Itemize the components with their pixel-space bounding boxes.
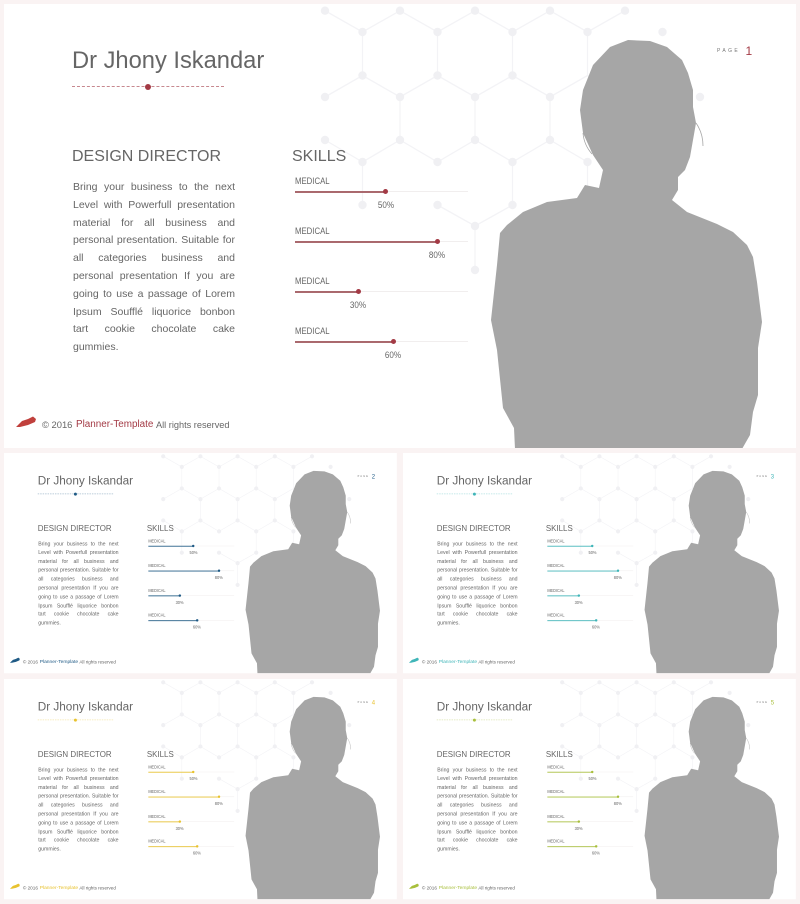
page number: PAGE: [756, 701, 768, 704]
skill bar 80%: 80%: [215, 801, 223, 806]
skill bar 60%: [148, 613, 234, 630]
page number: PAGE: [717, 48, 740, 54]
title dotted rule with marker: [72, 84, 224, 90]
heading: design director: DESIGN DIRECTOR: [436, 750, 510, 759]
skill bar 60%: MEDICAL: [295, 326, 330, 337]
text block: description: Level with Powerfull presentation: [437, 776, 517, 782]
skill bar 80%: MEDICAL: [547, 789, 564, 795]
panel: blue slide, page 2: [4, 453, 397, 673]
skill bar 50%: MEDICAL: [148, 538, 166, 544]
title: Dr Jhony Iskandar: [38, 701, 133, 714]
skill bar 50%: [295, 176, 468, 211]
title: Dr Jhony Iskandar: [436, 475, 532, 488]
text block: description: going to use a passage of Lorem: [73, 288, 235, 300]
footer with logo and copyright: [10, 884, 116, 890]
page number: 4: [372, 699, 375, 706]
text block: description: Ipsum Soufflé liquorice bonbon: [73, 306, 235, 318]
text block: description: [38, 767, 119, 852]
skill bar 50%: [148, 538, 198, 556]
skill bar 60%: 60%: [591, 625, 599, 630]
skill bar 80%: 80%: [613, 801, 621, 806]
text block: description: tart cookie chocolate cake: [437, 611, 517, 617]
footer with logo and copyright: © 2016: [23, 885, 38, 890]
text block: description: tart cookie chocolate cake: [38, 611, 119, 617]
text block: description: going to use a passage of Lorem: [38, 820, 119, 826]
text block: description: personal presentation. Suitable for: [73, 234, 235, 246]
title dotted rule with marker: [38, 718, 114, 722]
portrait silhouette: [246, 696, 380, 900]
text block: description: personal presentation If you are: [73, 270, 235, 282]
footer with logo and copyright: [16, 416, 230, 430]
skill bar 30%: 30%: [176, 600, 184, 605]
skill bar 30%: MEDICAL: [148, 588, 166, 593]
footer with logo and copyright: All rights reserved: [478, 659, 514, 664]
text block: description: going to use a passage of Lorem: [437, 594, 517, 600]
heading: skills: SKILLS: [292, 148, 346, 165]
text block: description: Level with Powerfull presentation: [437, 550, 517, 556]
text block: description: material for all business and: [73, 217, 235, 229]
skill bar 80%: [148, 563, 234, 580]
skill bar 30%: MEDICAL: [148, 814, 166, 819]
footer with logo and copyright: [408, 882, 516, 892]
skill bar 50%: 50%: [189, 776, 197, 782]
text block: description: all categories business and: [73, 252, 235, 264]
text block: description: Ipsum Soufflé liquorice bonbon: [437, 603, 517, 609]
page number: PAGE: [358, 475, 369, 478]
footer with logo and copyright: © 2016: [42, 419, 72, 430]
skill bar 80%: [547, 789, 633, 808]
skill bar 80%: [148, 789, 234, 806]
hexagon background pattern: [161, 680, 352, 813]
skill bar 30%: [148, 588, 234, 605]
skill bar 50%: [148, 764, 198, 782]
panel: main profile slide, page 1: [4, 4, 796, 448]
footer with logo and copyright: [409, 658, 515, 664]
heading: design director: DESIGN DIRECTOR: [436, 524, 510, 533]
skill bar 80%: 80%: [613, 575, 621, 580]
text block: description: gummies.: [38, 846, 61, 852]
heading: skills: SKILLS: [545, 524, 572, 533]
skill bar 30%: MEDICAL: [547, 588, 564, 593]
heading: skills: SKILLS: [147, 524, 174, 533]
skill bar 60%: 60%: [193, 851, 201, 856]
text block: description: all categories business and: [437, 802, 517, 808]
footer with logo and copyright: All rights reserved: [79, 659, 116, 664]
footer with logo and copyright: All rights reserved: [478, 885, 514, 890]
skill bar 50%: 50%: [588, 550, 596, 556]
text block: description: Bring your business to the next: [38, 767, 119, 773]
hexagon background pattern: [321, 6, 704, 274]
skill bar 30%: MEDICAL: [295, 276, 330, 287]
skill bar 30%: [295, 276, 468, 311]
text block: description: gummies.: [437, 846, 459, 852]
text block: description: going to use a passage of Lorem: [437, 820, 517, 826]
text block: description: material for all business and: [437, 784, 517, 790]
text block: description: Bring your business to the next: [73, 181, 235, 193]
heading: skills: SKILLS: [147, 750, 174, 759]
footer with logo and copyright: All rights reserved: [79, 885, 116, 890]
text block: description: Bring your business to the next: [437, 767, 517, 773]
portrait silhouette: [644, 470, 779, 674]
heading: design director: DESIGN DIRECTOR: [72, 148, 221, 165]
skill bar 80%: MEDICAL: [148, 563, 166, 569]
skill bar 50%: 50%: [378, 200, 394, 211]
skill bar 80%: MEDICAL: [547, 563, 564, 569]
text block: description: personal presentation If you are: [38, 811, 119, 817]
skill bar 60%: 60%: [193, 625, 201, 630]
footer with logo and copyright: Planner-Template: [438, 659, 477, 664]
heading: design director: DESIGN DIRECTOR: [38, 750, 112, 759]
hexagon background pattern: [402, 679, 795, 899]
hexagon background pattern: [161, 454, 352, 587]
heading: skills: SKILLS: [545, 750, 572, 759]
page number: PAGE: [358, 701, 369, 704]
skill bar 80%: [295, 226, 468, 261]
skill bar 80%: 80%: [429, 250, 445, 261]
text block: description: Level with Powerfull presentation: [73, 199, 235, 211]
text block: description: personal presentation. Suitable for: [38, 567, 119, 573]
page number: [756, 699, 774, 706]
skill bar 50%: 50%: [189, 550, 197, 556]
footer with logo and copyright: Planner-Template: [40, 659, 78, 664]
footer with logo and copyright: © 2016: [421, 659, 436, 664]
skill bar 60%: [148, 839, 234, 856]
page number: [358, 699, 375, 706]
footer with logo and copyright: © 2016: [421, 885, 436, 890]
panel: yellow slide, page 4: [4, 679, 397, 899]
text block: description: personal presentation. Suitable for: [437, 567, 517, 573]
text block: description: going to use a passage of Lorem: [38, 594, 119, 600]
page number: PAGE: [756, 475, 768, 478]
skill bar 30%: [148, 814, 234, 831]
footer with logo and copyright: Planner-Template: [438, 885, 477, 890]
footer with logo and copyright: © 2016: [23, 659, 38, 664]
skill bar 80%: MEDICAL: [148, 789, 166, 795]
skill bar 30%: 30%: [176, 826, 184, 831]
text block: description: all categories business and: [437, 576, 517, 582]
text block: description: personal presentation If you are: [38, 585, 119, 591]
portrait silhouette: [402, 679, 795, 899]
text block: description: Ipsum Soufflé liquorice bonbon: [38, 829, 119, 835]
text block: description: personal presentation If you are: [437, 811, 517, 817]
text block: description: all categories business and: [38, 802, 119, 808]
text block: description: [38, 541, 119, 626]
text block: description: personal presentation If you are: [437, 585, 517, 591]
text block: description: material for all business and: [437, 558, 517, 564]
text block: description: material for all business and: [38, 784, 119, 790]
text block: description: tart cookie chocolate cake: [73, 323, 235, 335]
text block: description: gummies.: [437, 620, 459, 626]
skill bar 60%: [295, 326, 468, 361]
text block: description: Bring your business to the next: [38, 541, 119, 547]
page number: [358, 473, 375, 480]
panel: green slide, page 5: [402, 679, 795, 899]
skill bar 30%: MEDICAL: [547, 814, 564, 819]
skill bar 80%: MEDICAL: [295, 226, 330, 237]
skill bar 50%: 50%: [588, 776, 596, 782]
skill bar 50%: [547, 538, 596, 556]
text block: description: gummies.: [38, 620, 61, 626]
skill bar 60%: MEDICAL: [148, 613, 166, 618]
page number: 1: [746, 44, 752, 58]
title: Dr Jhony Iskandar: [72, 48, 264, 74]
footer with logo and copyright: Planner-Template: [40, 885, 78, 890]
footer with logo and copyright: All rights reserved: [156, 420, 230, 430]
portrait silhouette: [246, 470, 380, 674]
skill bar 30%: 30%: [574, 826, 582, 831]
skill bar 50%: [547, 764, 633, 783]
page number: [717, 44, 752, 58]
title: Dr Jhony Iskandar: [38, 475, 133, 488]
skill bar 60%: [547, 839, 633, 858]
title dotted rule with marker: [436, 492, 512, 496]
heading: design director: DESIGN DIRECTOR: [38, 524, 112, 533]
skill bar 60%: MEDICAL: [547, 613, 564, 618]
hexagon background pattern: [560, 454, 750, 587]
skill bar 50%: MEDICAL: [148, 764, 166, 770]
text block: description: Level with Powerfull presentation: [38, 776, 119, 782]
text block: description: Level with Powerfull presentation: [38, 550, 119, 556]
skill bar 50%: MEDICAL: [295, 176, 330, 187]
skill bar 30%: [547, 814, 633, 833]
text block: description: tart cookie chocolate cake: [437, 837, 517, 843]
footer with logo and copyright: [10, 658, 116, 664]
skill bar 30%: 30%: [574, 600, 582, 605]
portrait silhouette: [491, 40, 762, 448]
page number: 3: [770, 473, 774, 480]
panel: teal slide, page 3: [402, 453, 795, 673]
text block: description: material for all business and: [38, 558, 119, 564]
footer with logo and copyright: Planner-Template: [76, 419, 153, 430]
text block: description: personal presentation. Suitable for: [437, 793, 517, 799]
skill bar 30%: [547, 588, 633, 605]
skill bar 60%: MEDICAL: [148, 839, 166, 844]
page number: 5: [770, 699, 774, 706]
page number: 2: [372, 473, 375, 480]
text block: description: [73, 181, 235, 353]
title dotted rule with marker: [38, 492, 114, 496]
skill bar 60%: 60%: [591, 851, 599, 856]
text block: description: personal presentation. Suitable for: [38, 793, 119, 799]
skill bar 50%: MEDICAL: [547, 538, 564, 544]
page number: [756, 473, 774, 480]
skill bar 60%: [547, 613, 633, 630]
text block: description: [437, 541, 518, 626]
text block: description: Ipsum Soufflé liquorice bonbon: [38, 603, 119, 609]
skill bar 50%: MEDICAL: [547, 764, 564, 770]
skill bar 80%: 80%: [215, 575, 223, 580]
text block: description: all categories business and: [38, 576, 119, 582]
title: Dr Jhony Iskandar: [436, 701, 532, 714]
text block: description: Ipsum Soufflé liquorice bonbon: [437, 829, 517, 835]
text block: description: tart cookie chocolate cake: [38, 837, 119, 843]
skill bar 60%: 60%: [385, 350, 401, 361]
skill bar 80%: [547, 563, 633, 580]
text block: description: gummies.: [73, 341, 119, 353]
text block: description: [437, 766, 517, 854]
skill bar 30%: 30%: [350, 300, 366, 311]
title dotted rule with marker: [436, 718, 512, 722]
skill bar 60%: MEDICAL: [547, 839, 564, 844]
text block: description: Bring your business to the next: [437, 541, 517, 547]
